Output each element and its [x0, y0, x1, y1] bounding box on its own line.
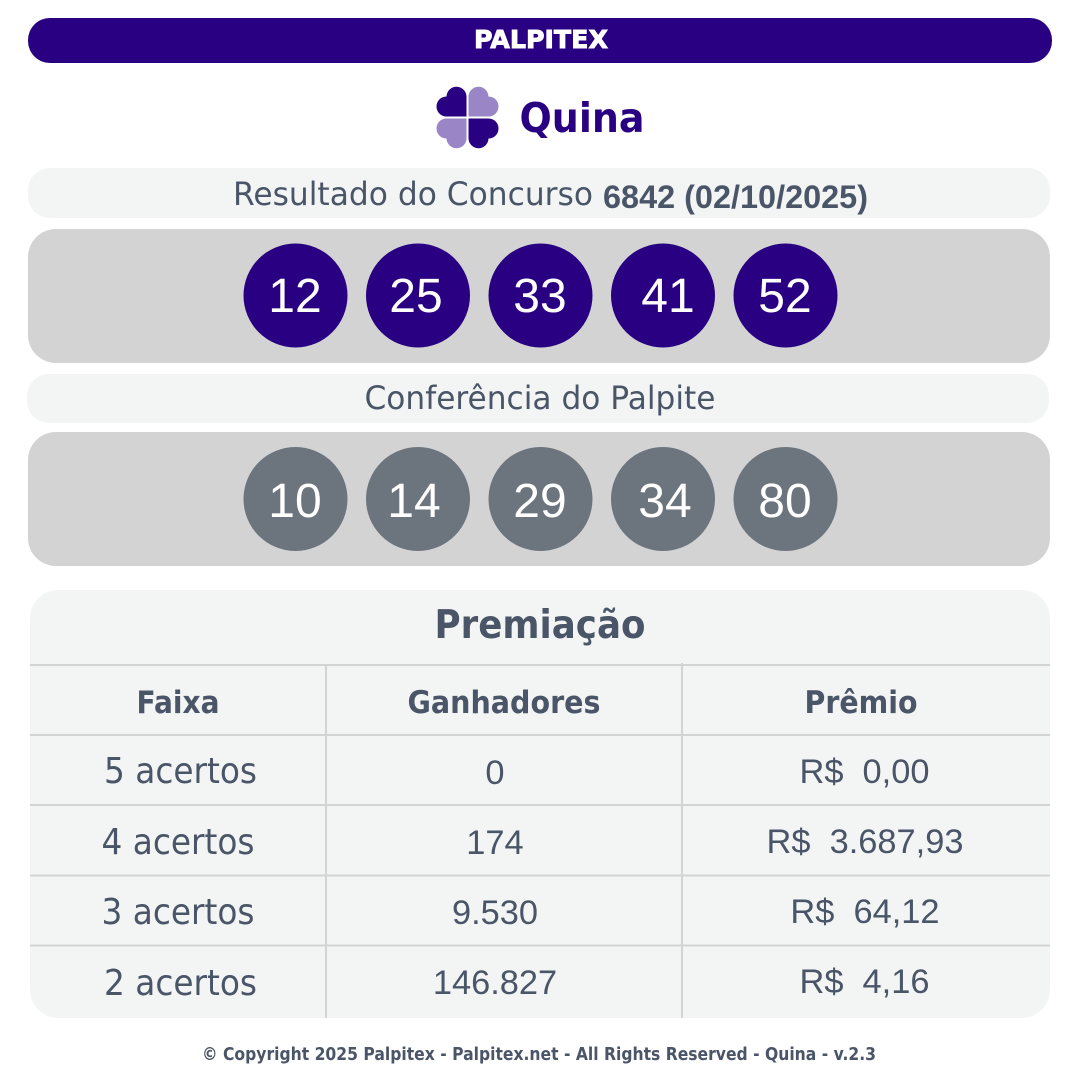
number ball 41: [611, 244, 715, 348]
number ball 10: 10: [268, 475, 322, 528]
row: 5 acertos: 5 acertos: [104, 751, 257, 792]
row: 3 acertos: 3 acertos: [102, 892, 254, 933]
number ball 80: [734, 447, 838, 551]
number ball 14: 14: [387, 475, 441, 528]
row: 3 acertos: [102, 892, 940, 933]
icon: clover logo: [436, 87, 498, 148]
row: 2 acertos: 2 acertos: [104, 963, 257, 1004]
number ball 34: [611, 447, 715, 551]
number ball 14: [366, 447, 470, 551]
row: 3 acertos: 9.530: [452, 894, 538, 932]
header banner: [28, 18, 1052, 63]
header banner: PALPITEX: [474, 25, 608, 54]
column headers: Prêmio: [804, 685, 918, 721]
column headers: Ganhadores: [408, 685, 600, 721]
number ball 25: [366, 244, 470, 348]
row: 4 acertos: 4 acertos: [102, 822, 254, 863]
row: 3 acertos: R$ 64,12: [790, 893, 940, 931]
number ball 29: 29: [513, 475, 567, 528]
panel: result heading: 6842 (02/10/2025): [603, 179, 868, 215]
number ball 12: 12: [268, 270, 322, 323]
row: 4 acertos: 174: [466, 824, 524, 862]
row: 5 acertos: R$ 0,00: [799, 753, 930, 791]
row: 4 acertos: [102, 822, 963, 863]
row: 5 acertos: [104, 751, 930, 792]
footer copyright: © Copyright 2025 Palpitex - Palpitex.net - All Rights Reserved - Quina - v.2.3: [202, 1044, 876, 1065]
table heading: Premiação: [434, 603, 646, 648]
row: 2 acertos: R$ 4,16: [799, 963, 930, 1001]
number ball 29: [488, 447, 592, 551]
row: 2 acertos: 146.827: [433, 964, 557, 1002]
number ball 12: [244, 244, 348, 348]
column headers: Faixa: [136, 685, 220, 721]
number ball 25: 25: [389, 270, 443, 323]
number ball 52: 52: [758, 270, 812, 323]
column headers: [136, 685, 918, 721]
number ball 33: 33: [513, 270, 567, 323]
title: Quina: [520, 94, 644, 142]
number ball 33: [488, 244, 592, 348]
panel: guessed numbers: [28, 432, 1050, 566]
panel: drawn numbers: [28, 229, 1050, 363]
row: 4 acertos: R$ 3.687,93: [767, 823, 963, 861]
panel: check heading: Conferência do Palpite: [364, 379, 716, 417]
panel: prize table: [30, 590, 1050, 1018]
row: 2 acertos: [104, 963, 930, 1004]
panel: check heading: [27, 374, 1049, 423]
number ball 34: 34: [638, 475, 692, 528]
number ball 41: 41: [641, 270, 695, 323]
panel: result heading: [28, 168, 1050, 218]
row: 5 acertos: 0: [485, 754, 505, 792]
number ball 52: [734, 244, 838, 348]
number ball 10: [244, 447, 348, 551]
number ball 80: 80: [758, 475, 812, 528]
panel: result heading: Resultado do Concurso: [233, 175, 593, 213]
